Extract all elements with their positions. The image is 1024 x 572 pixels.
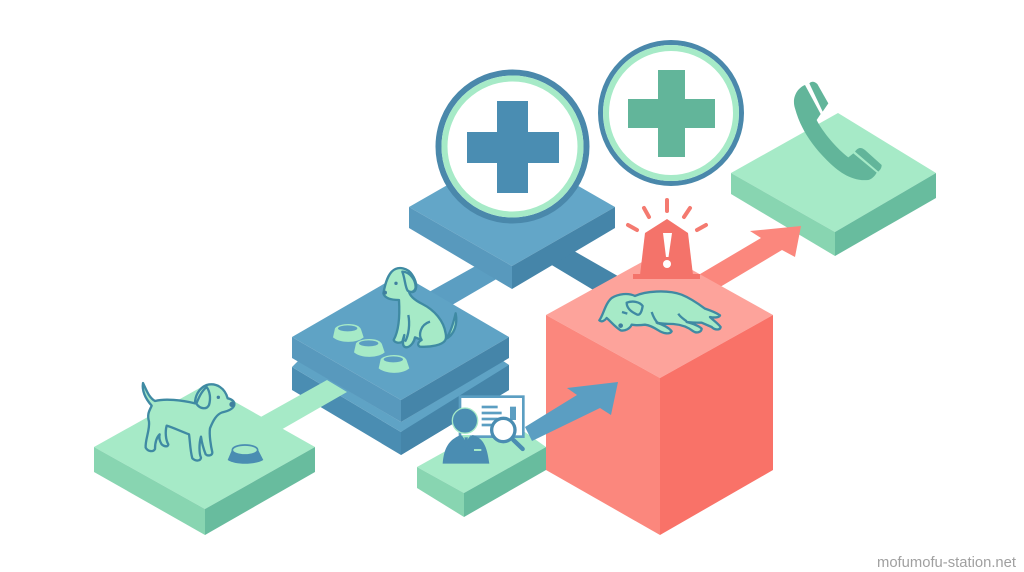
panel: stacked blue platform (292, 274, 509, 455)
icon: hospital cross badge green (600, 42, 742, 184)
connector: dark blue to red cube (540, 243, 630, 300)
panel: upper blue platform (409, 148, 615, 289)
icon: three bowls (333, 324, 409, 373)
icon: sleeping dog (599, 291, 721, 333)
icon: hospital cross badge blue (438, 72, 586, 220)
icon: food bowl (228, 445, 263, 464)
panel: lower-left green platform (94, 385, 315, 535)
connector: green path (250, 380, 347, 435)
watermark: mofumofu-station.net (877, 555, 1016, 571)
panel: small green platform (417, 418, 546, 517)
icon: sitting dog (383, 268, 456, 347)
connector: blue platforms (420, 258, 512, 312)
icon: standing dog (143, 383, 235, 461)
panel: red cube (546, 252, 773, 535)
icon: vet with chart and magnifier (443, 397, 523, 464)
arrow: blue into red cube (525, 382, 618, 441)
arrow: red to phone platform (690, 226, 801, 293)
panel: phone green platform (731, 113, 936, 256)
icon: telephone (794, 82, 882, 180)
icon: alarm siren (628, 200, 706, 279)
